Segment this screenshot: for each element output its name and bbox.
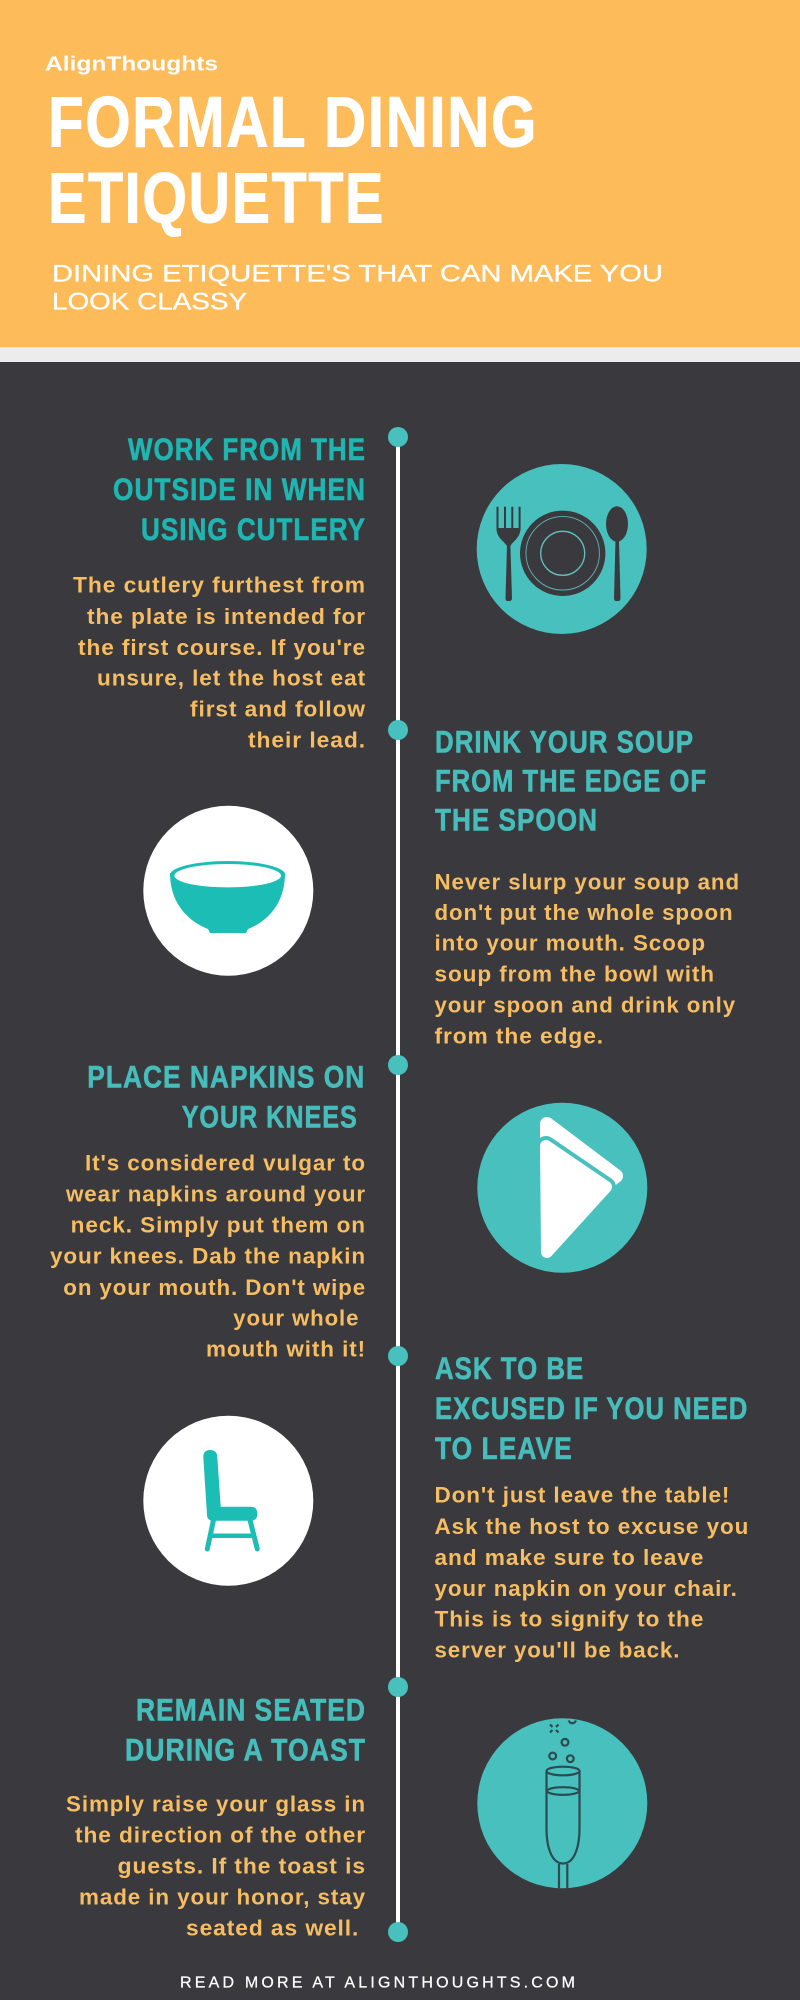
body text: cutlery: first and follow	[190, 697, 366, 722]
heading: drink your soup: DRINK YOUR SOUP	[435, 723, 694, 759]
body text: napkins: wear napkins around your	[65, 1182, 366, 1207]
body text: cutlery: the first course. If you're	[78, 635, 366, 660]
body text: excused: your napkin on your chair.	[434, 1576, 738, 1601]
body text: cutlery: their lead.	[248, 728, 366, 753]
title: FORMAL DINING	[48, 84, 538, 163]
panel: step 4 excused	[143, 1350, 749, 1662]
heading: work from the outside in: WORK FROM THE	[128, 431, 366, 467]
title: ETIQUETTE	[48, 160, 385, 239]
icon: bowl	[143, 806, 313, 976]
body text: excused: This is to signify to the	[434, 1607, 704, 1632]
panel: header	[0, 0, 800, 362]
heading: remain seated: DURING A TOAST	[125, 1732, 366, 1768]
body text: napkins: on your mouth. Don't wipe	[63, 1275, 366, 1300]
body text: toast: made in your honor, stay	[79, 1884, 366, 1909]
body text: soup: from the edge.	[434, 1023, 604, 1048]
heading: place napkins	[87, 1058, 365, 1134]
heading: remain seated: REMAIN SEATED	[136, 1692, 366, 1728]
body text: napkins: mouth with it!	[206, 1337, 366, 1362]
panel: step 5 toast	[66, 1692, 647, 1941]
subtitle: DINING ETIQUETTE'S THAT CAN MAKE YOU	[52, 261, 663, 288]
title	[48, 84, 538, 239]
body text: soup	[434, 869, 740, 1048]
heading: ask to be excused	[435, 1350, 748, 1466]
body text: excused	[434, 1483, 749, 1662]
footer link text: READ MORE AT ALIGNTHOUGHTS.COM	[180, 1974, 575, 1991]
heading: drink your soup: THE SPOON	[435, 802, 598, 838]
panel: step 2 soup	[143, 723, 740, 1048]
body text: cutlery: the plate is intended for	[87, 604, 366, 629]
body text: napkins	[50, 1151, 366, 1362]
body text: soup: Never slurp your soup and	[434, 869, 740, 894]
heading: drink your soup: FROM THE EDGE OF	[435, 763, 707, 799]
icon: champagne glass	[477, 1718, 647, 1888]
body text: toast: seated as well.	[186, 1916, 359, 1941]
body text: cutlery: The cutlery furthest from	[73, 573, 366, 598]
heading: remain seated	[125, 1692, 366, 1768]
heading: drink your soup	[435, 723, 707, 838]
subtitle: LOOK CLASSY	[52, 288, 247, 315]
icon: chair	[143, 1416, 313, 1586]
body text: excused: server you'll be back.	[434, 1637, 680, 1662]
brand name: AlignThoughts	[45, 54, 218, 76]
body text: soup: soup from the bowl with	[434, 962, 715, 987]
icon: folded napkin	[477, 1103, 647, 1273]
body text: toast: guests. If the toast is	[118, 1853, 366, 1878]
body text: soup: don't put the whole spoon	[434, 900, 734, 925]
heading: work from the outside in: USING CUTLERY	[141, 511, 366, 547]
body text: excused: Don't just leave the table!	[434, 1483, 730, 1508]
body text: toast	[66, 1792, 366, 1941]
panel: step 1 cutlery	[73, 431, 647, 753]
body text: excused: Ask the host to excuse you	[434, 1514, 749, 1539]
body text: napkins: neck. Simply put them on	[71, 1213, 366, 1238]
heading: place napkins: PLACE NAPKINS ON	[87, 1058, 365, 1094]
subtitle	[52, 261, 663, 315]
heading: work from the outside in: OUTSIDE IN WHEN	[113, 471, 366, 507]
body text: toast: Simply raise your glass in	[66, 1792, 366, 1817]
body text: toast: the direction of the other	[75, 1823, 366, 1848]
panel: step 3 napkins	[50, 1058, 647, 1362]
body text: excused: and make sure to leave	[434, 1545, 704, 1570]
timeline	[388, 427, 408, 1942]
body text: soup: into your mouth. Scoop	[434, 931, 706, 956]
heading: place napkins: YOUR KNEES	[182, 1098, 358, 1134]
body text: cutlery: unsure, let the host eat	[97, 666, 366, 691]
body text: soup: your spoon and drink only	[434, 993, 736, 1018]
body text: napkins: your whole	[233, 1306, 359, 1331]
heading: work from the outside in	[113, 431, 366, 547]
body text: napkins: your knees. Dab the napkin	[50, 1243, 366, 1268]
body text: cutlery	[73, 573, 366, 753]
icon: plate with fork and spoon	[477, 464, 647, 634]
heading: ask to be excused: ASK TO BE	[435, 1350, 584, 1386]
heading: ask to be excused: TO LEAVE	[435, 1430, 573, 1466]
body text: napkins: It's considered vulgar to	[85, 1151, 366, 1176]
